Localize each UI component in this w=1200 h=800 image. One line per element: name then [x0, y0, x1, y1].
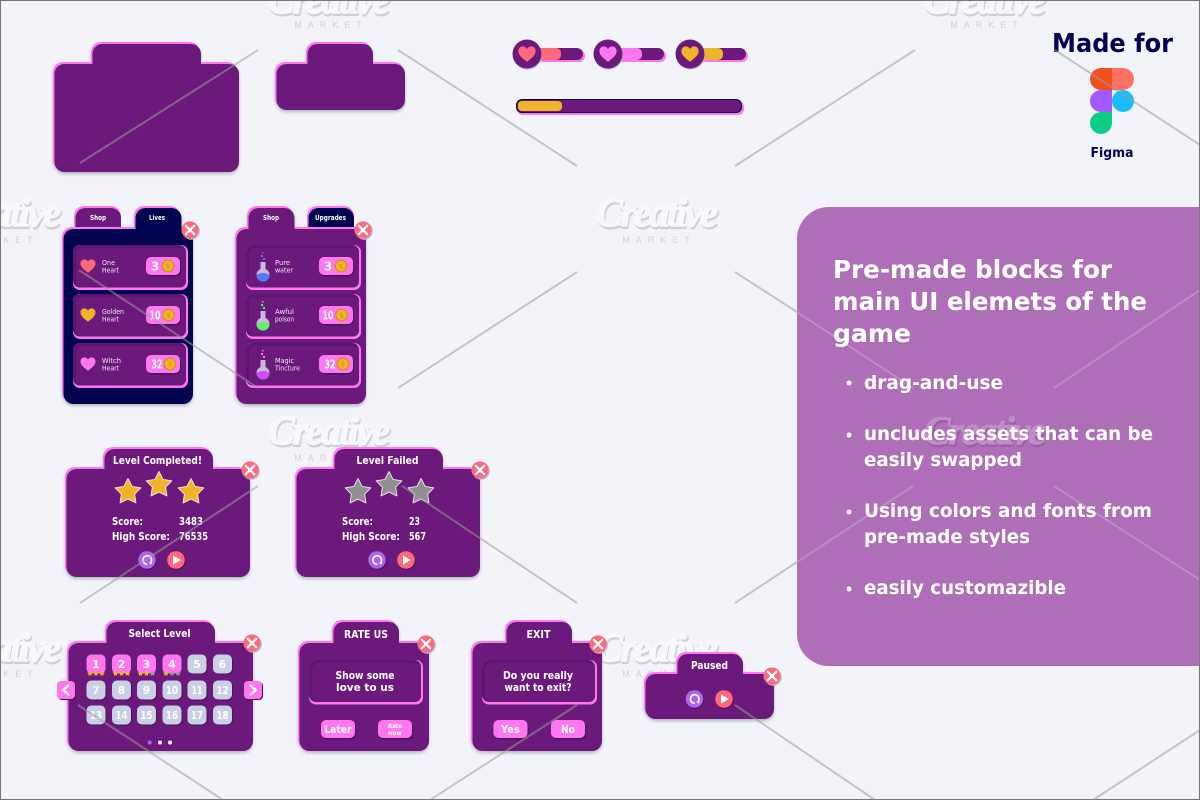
bullet: drag-and-use: drag-and-use: [864, 372, 1003, 394]
title: Level Failed: [356, 454, 418, 467]
button: yes: Yes: [500, 723, 520, 736]
feature heading: [833, 255, 1147, 348]
item: golden heart: Heart: [102, 314, 119, 324]
scores: [342, 516, 426, 543]
panel: paused: [644, 652, 782, 719]
watermark wordmark on the feature panel: Creative: [925, 410, 1047, 455]
scores: 76535: [179, 531, 208, 543]
item: one heart: 3: [151, 260, 159, 274]
tab: upgrades: [307, 206, 354, 232]
feature heading: game: [833, 319, 911, 348]
level grid: 14: [116, 709, 128, 722]
item: witch heart: Heart: [102, 364, 119, 372]
panel: exit: [471, 620, 608, 751]
window body: [471, 620, 602, 751]
button: rate now: Rate: [388, 723, 402, 730]
bullet: colors and fonts: pre-made styles: [864, 526, 1030, 548]
panel: select level: [57, 620, 263, 751]
message box: love to us: [336, 681, 394, 694]
level grid: 9: [143, 684, 150, 697]
watermark wordmarks under the panels: Creative: [269, 410, 391, 455]
button: later: Later: [324, 723, 352, 736]
item: golden heart: Golden: [102, 307, 124, 316]
figma label: Figma: [1090, 146, 1134, 161]
scores: High Score:: [342, 531, 400, 543]
watermark wordmarks under the panels: [0, 0, 1047, 679]
item: magic tincture: 32: [324, 358, 336, 372]
title: RATE US: [344, 628, 388, 641]
item: witch heart: 32: [152, 358, 162, 372]
tab: shop: [74, 206, 121, 232]
item: golden heart: 10: [150, 308, 160, 322]
watermark wordmarks under the panels: Creative: [596, 625, 718, 670]
scores: Score:: [342, 516, 373, 528]
level grid: 10: [166, 684, 178, 697]
item: awful poison: [246, 294, 361, 339]
level grid: 16: [166, 709, 178, 722]
button: no: No: [561, 723, 575, 736]
bullet: swappable assets: uncludes assets that can be: [864, 423, 1153, 445]
window body: [295, 447, 480, 577]
item: awful poison: poison: [275, 314, 294, 324]
scores: 3483: [179, 516, 203, 528]
life bar: gold heart: [676, 40, 748, 70]
icon: play: [397, 551, 416, 570]
watermark wordmarks under the panels: MARKET: [294, 20, 368, 30]
item: pure water: Pure: [275, 258, 291, 267]
item: awful poison: 10: [322, 308, 334, 322]
scores: Score:: [112, 516, 143, 528]
watermark wordmarks under the panels: Creative: [596, 190, 718, 235]
window body: [65, 447, 250, 577]
message box: Do you really: [503, 669, 573, 682]
scores: [112, 516, 208, 543]
level grid: 13: [90, 709, 102, 722]
grey stars: [345, 472, 434, 503]
icon: close: [417, 635, 436, 654]
icon: close: [763, 667, 782, 686]
watermark wordmarks under the panels: MARKET: [950, 20, 1024, 30]
made for heading: Made for: [1052, 29, 1173, 59]
icon: close: [243, 634, 262, 653]
panel: upgrades shop: [235, 206, 373, 404]
watermark wordmarks under the panels: MARKET: [622, 235, 696, 245]
icon: figma logo: [1090, 68, 1134, 134]
title: Select Level: [128, 627, 190, 640]
tab: shop: Shop: [90, 213, 106, 222]
level grid: 15: [140, 709, 152, 722]
item: magic tincture: [246, 343, 361, 388]
level grid: 17: [191, 709, 203, 722]
window body: [67, 620, 253, 751]
message box: [482, 660, 597, 704]
item: pure water: 3: [324, 260, 332, 274]
panel: small empty tabbed window: [275, 42, 405, 110]
icon: play: [715, 690, 734, 709]
bullet: colors and fonts: [846, 500, 1152, 548]
message box: want to exit?: [504, 681, 572, 694]
pagination dots: [148, 740, 172, 744]
scores: 567: [409, 531, 426, 543]
scores: High Score:: [112, 531, 170, 543]
level grid: [86, 654, 233, 726]
message box: Show some: [336, 669, 394, 682]
panel: feature list: [797, 207, 1200, 666]
item: witch heart: [73, 343, 188, 388]
icon: close: [241, 461, 260, 480]
life bar: pink heart: [594, 40, 666, 70]
title: Level Completed!: [113, 454, 202, 467]
watermark wordmarks under the panels: Creative: [597, 627, 719, 672]
item: witch heart: Witch: [102, 356, 121, 365]
panel: lives shop: [62, 206, 200, 404]
bullet: customizable: easily customazible: [864, 577, 1066, 599]
message box: [309, 660, 423, 704]
item: one heart: [73, 245, 188, 290]
arrow: previous: [57, 681, 76, 700]
button: rate now: [378, 720, 413, 740]
icon: play: [167, 551, 186, 570]
button: rate now: now: [388, 730, 402, 737]
level grid: 18: [216, 709, 228, 722]
bullet: swappable assets: [846, 423, 1153, 471]
panel: large empty tabbed window: [53, 42, 239, 172]
watermark wordmarks under the panels: MARKET: [294, 453, 368, 463]
level grid: 11: [192, 684, 202, 697]
window body: [644, 652, 774, 719]
item: one heart: Heart: [102, 266, 119, 274]
watermark wordmarks under the panels: Creative: [597, 192, 719, 237]
tab: upgrades: Upgrades: [315, 213, 346, 222]
item: pure water: water: [275, 266, 293, 274]
item: awful poison: Awful: [275, 307, 294, 316]
level grid: 5: [193, 658, 201, 671]
title: Paused: [691, 659, 728, 672]
life bar: salmon heart: [512, 40, 585, 70]
feature heading: main UI elemets of the: [833, 287, 1147, 316]
wide progress bar: [516, 100, 744, 115]
item: magic tincture: Magic: [275, 356, 294, 365]
level grid: 3: [143, 658, 150, 671]
scores: 23: [409, 516, 420, 528]
level grid: 4: [168, 658, 176, 671]
icon: close: [354, 221, 373, 240]
level grid: 7: [92, 684, 100, 697]
level grid: 12: [216, 684, 228, 697]
icon: close: [181, 221, 200, 240]
item: pure water: [246, 245, 361, 290]
panel: level completed: [65, 447, 260, 577]
tab label: lives: Lives: [149, 213, 165, 222]
arrow: next: [244, 681, 263, 700]
icon: replay: [368, 551, 387, 570]
icon: close: [589, 635, 608, 654]
panel: level failed: [295, 447, 490, 577]
bullet: swappable assets: easily swapped: [864, 449, 1022, 471]
icon: replay: [138, 551, 157, 570]
watermark wordmark on the feature panel: Creative: [924, 408, 1046, 453]
feature heading: Pre-made blocks for: [833, 255, 1113, 284]
item: one heart: One: [102, 258, 116, 267]
level grid: 2: [118, 658, 125, 671]
window body: [235, 206, 366, 404]
title: EXIT: [526, 628, 551, 641]
window body: [298, 620, 429, 751]
window body: [62, 206, 193, 404]
level grid: 1: [92, 658, 100, 671]
item: magic tincture: Tincture: [274, 364, 300, 372]
level grid: 6: [219, 658, 227, 671]
tab label: shop: Shop: [263, 213, 279, 222]
level star ratings: [87, 670, 181, 676]
bullet: colors and fonts: Using colors and fonts from: [864, 500, 1152, 522]
icon: replay: [686, 690, 704, 709]
heart progress bars: [512, 40, 748, 70]
level grid: 8: [118, 684, 125, 697]
icon: close: [471, 461, 490, 480]
watermark wordmarks under the panels: MARKET: [622, 669, 696, 679]
panel: rate us: [298, 620, 436, 751]
gold stars: [115, 472, 204, 503]
watermark wordmarks under the panels: Creative: [268, 408, 390, 453]
item: golden heart: [73, 294, 188, 339]
